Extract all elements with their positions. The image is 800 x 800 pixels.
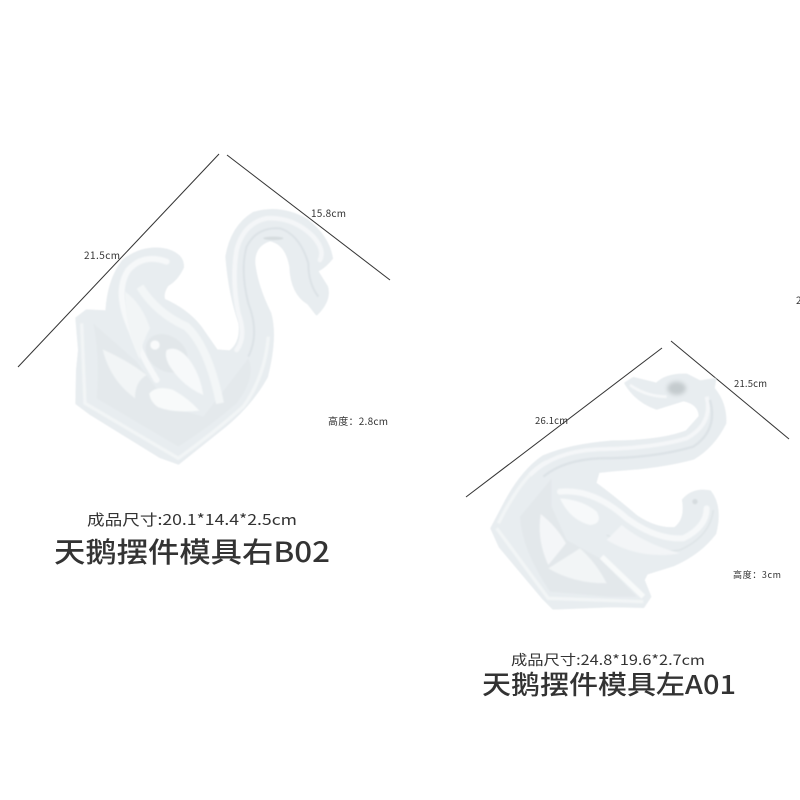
dimension line: width 26.1cm — [466, 348, 662, 497]
neck channel — [543, 400, 712, 477]
outer body channel — [82, 323, 268, 458]
head shadow — [667, 382, 686, 395]
neck rim highlight — [235, 218, 321, 350]
head shadow — [263, 237, 283, 240]
neck inner channel — [244, 228, 318, 357]
dimension line: width 21.5cm — [18, 154, 219, 367]
illustration: swan mould B02 — [77, 210, 332, 463]
wing inner band — [140, 287, 220, 403]
mould body — [77, 210, 332, 463]
dimension line: depth 15.8cm — [227, 155, 390, 280]
droplet shine — [150, 340, 160, 350]
tail channel highlight — [602, 557, 643, 597]
wing sweep highlight — [122, 259, 167, 380]
panel: left-facing swan mould A01 — [466, 341, 789, 608]
right feather — [607, 525, 680, 555]
illustration: swan mould A01 — [492, 375, 725, 608]
droplet feather — [560, 498, 599, 525]
beak highlight — [630, 385, 667, 397]
lower feather — [548, 548, 607, 583]
wing sweep highlight — [560, 491, 707, 538]
wing channel — [607, 510, 713, 552]
inner tray — [520, 478, 637, 597]
label: height 2.8cm: 高度：2.8cm — [328, 413, 388, 428]
neck rim highlight — [530, 397, 708, 475]
outer rim highlight — [497, 462, 643, 602]
panel: right-facing swan mould B02 — [18, 154, 390, 463]
caption: A01 size: 成品尺寸:24.8*19.6*2.7cm — [511, 650, 705, 670]
label: 21.5cm: 21.5cm — [734, 376, 767, 390]
upper feather — [540, 514, 566, 565]
label: 15.8cm: 15.8cm — [311, 205, 346, 220]
caption: B02 size: 成品尺寸:20.1*14.4*2.5cm — [87, 509, 297, 530]
caption: B02 name: 天鹅摆件模具右B02 — [54, 531, 330, 571]
droplet feather — [166, 349, 203, 395]
label: 26.1cm: 26.1cm — [535, 413, 568, 427]
dimension line: depth 21.5cm — [671, 341, 789, 439]
caption: A01 name: 天鹅摆件模具左A01 — [482, 665, 736, 702]
mould body — [492, 375, 725, 608]
label: height 3cm: 高度：3cm — [733, 568, 781, 581]
droplet ring — [138, 326, 195, 381]
label: 21.5cm: 21.5cm — [84, 247, 120, 262]
small feather — [149, 388, 199, 411]
inner tray — [93, 323, 251, 447]
curl tip — [692, 499, 698, 504]
lower feather — [103, 349, 147, 398]
upper feather — [125, 292, 150, 360]
